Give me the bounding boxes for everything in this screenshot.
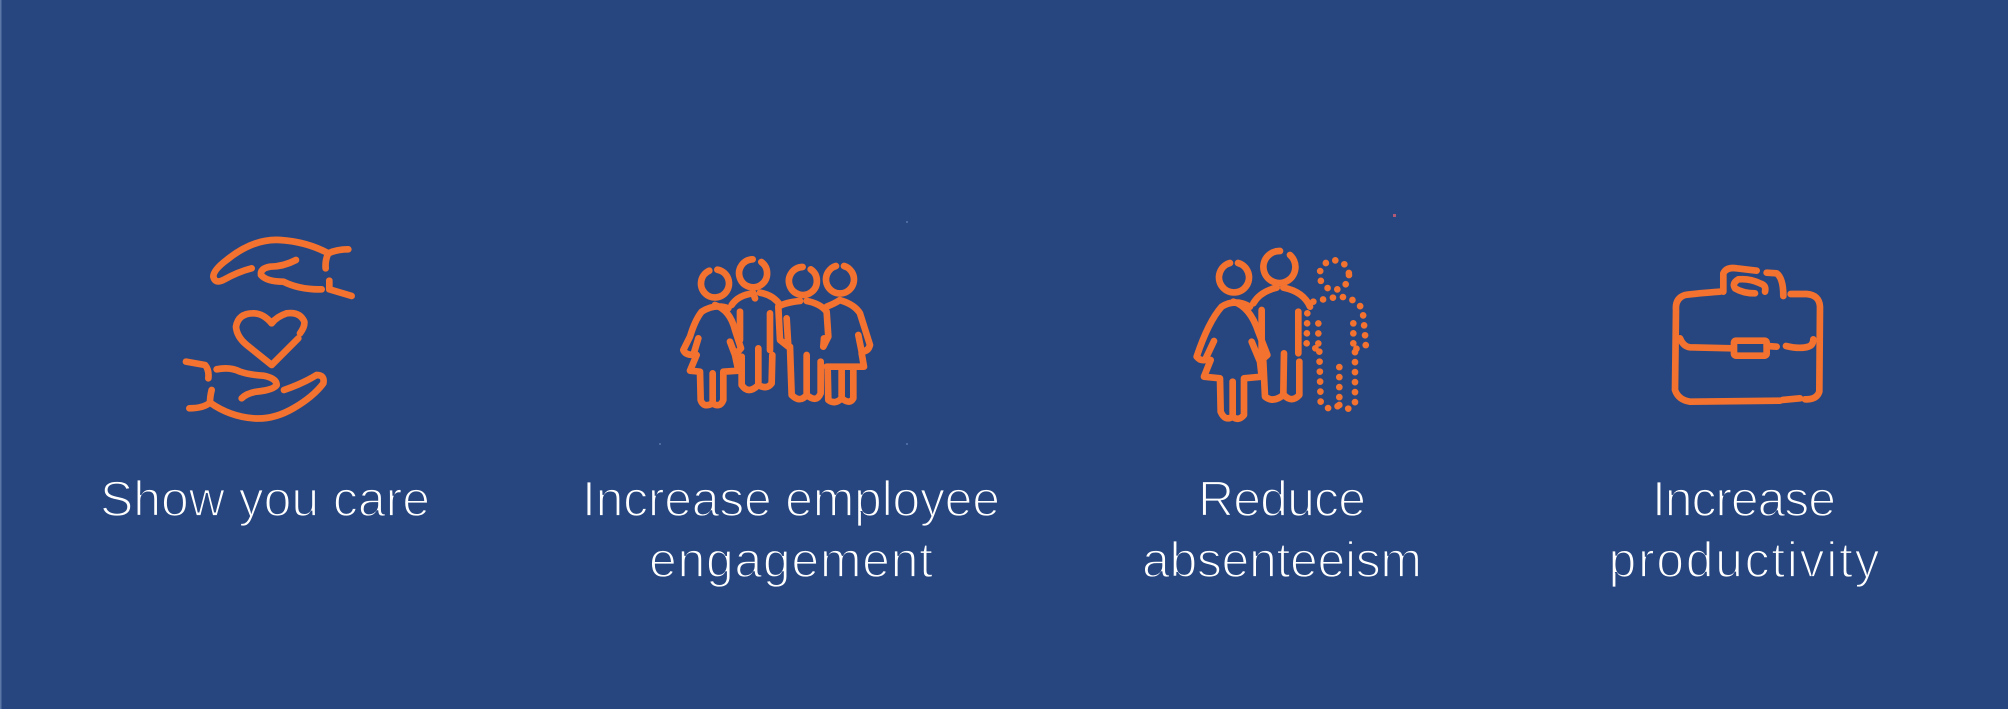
icon: hands holding heart <box>186 240 352 419</box>
icon: briefcase <box>1675 268 1820 402</box>
label: reduce absenteeism <box>1142 471 1422 588</box>
label: increase employee engagement: Increase employee <box>582 471 1000 527</box>
icon: people with one absent <box>1197 251 1366 419</box>
label: increase employee engagement: engagement <box>649 532 933 588</box>
label: reduce absenteeism: Reduce <box>1198 471 1366 527</box>
label: increase productivity <box>1608 471 1880 588</box>
label: increase productivity: productivity <box>1608 532 1880 588</box>
label: reduce absenteeism: absenteeism <box>1142 532 1422 588</box>
icon: four employees <box>683 259 870 405</box>
label: increase productivity: Increase <box>1652 471 1836 527</box>
label: show you care: Show you care <box>100 471 430 527</box>
label: increase employee engagement <box>582 471 1000 588</box>
